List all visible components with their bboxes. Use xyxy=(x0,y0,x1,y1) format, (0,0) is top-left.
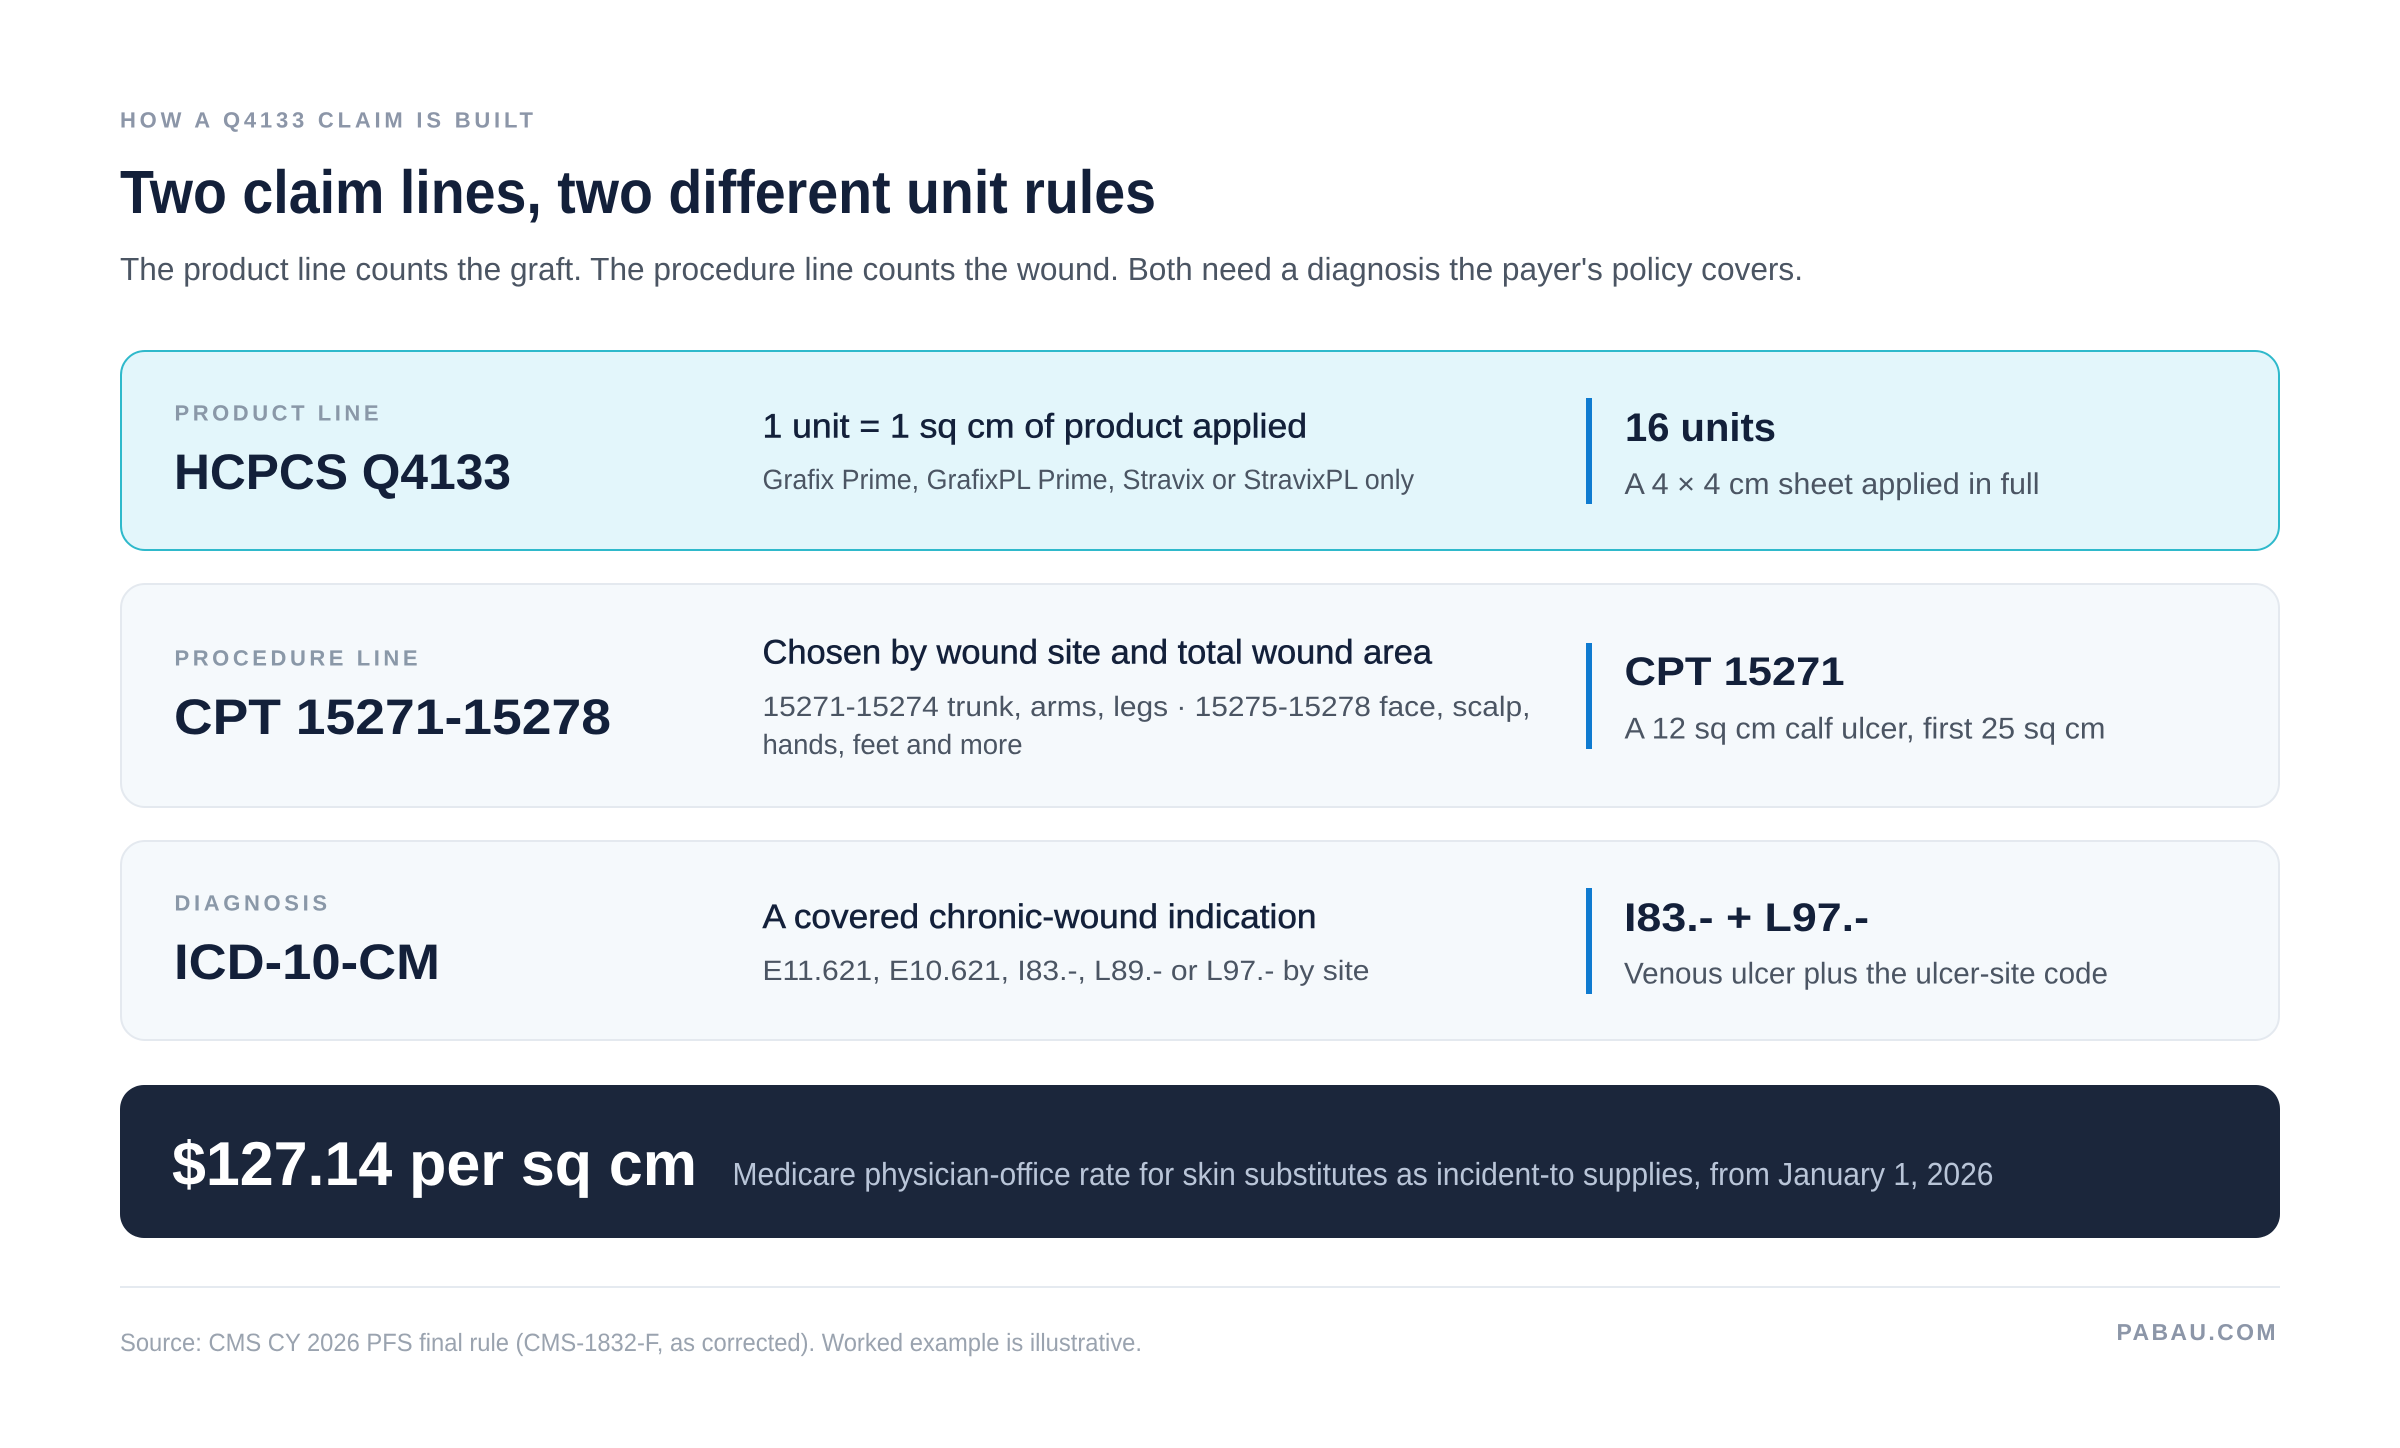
example value: CPT 15271 xyxy=(1624,650,1844,694)
label: product line: PRODUCT LINE xyxy=(174,400,378,426)
example value: 16 units xyxy=(1625,406,1776,450)
source note: Source: CMS CY 2026 PFS final rule (CMS-1832-F, as corrected). Worked example is illustrative. xyxy=(120,1329,1142,1357)
accent bar xyxy=(1586,398,1592,504)
example note: A 12 sq cm calf ulcer, first 25 sq cm xyxy=(1624,712,2106,746)
code: ICD-10-CM: ICD-10-CM xyxy=(174,934,440,990)
rule heading: A covered chronic-wound indication xyxy=(762,898,1316,936)
example note: A 4 × 4 cm sheet applied in full xyxy=(1624,468,2040,501)
panel: procedure line xyxy=(121,584,2279,807)
accent bar xyxy=(1586,643,1592,749)
panel: diagnosis xyxy=(121,841,2279,1040)
brand: PABAU.COM xyxy=(2116,1319,2276,1345)
example value: I83.- + L97.- xyxy=(1624,896,1869,940)
example note: Venous ulcer plus the ulcer-site code xyxy=(1624,958,2108,990)
code: HCPCS Q4133: HCPCS Q4133 xyxy=(174,444,511,500)
rate figure: $127.14 per sq cm xyxy=(172,1130,697,1199)
rule detail: E11.621, E10.621, I83.-, L89.- or L97.- by site xyxy=(762,955,1370,986)
accent bar xyxy=(1586,888,1592,994)
rule detail: Grafix Prime, GrafixPL Prime, Stravix or StravixPL only xyxy=(762,464,1414,495)
panel: product line xyxy=(121,351,2279,550)
rule heading: Chosen by wound site and total wound area xyxy=(762,634,1432,672)
rule detail: 15271-15274 trunk, arms, legs · 15275-15278 face, scalp, xyxy=(762,691,1530,722)
rule heading: 1 unit = 1 sq cm of product applied xyxy=(762,408,1307,446)
subtitle: The product line counts the graft. The procedure line counts the wound. Both need a diagnosis the payer's policy covers. xyxy=(120,251,1803,287)
rule detail: hands, feet and more xyxy=(762,729,1022,760)
label: diagnosis: DIAGNOSIS xyxy=(174,890,327,916)
eyebrow: HOW A Q4133 CLAIM IS BUILT xyxy=(120,108,534,132)
label: procedure line: PROCEDURE LINE xyxy=(174,646,418,670)
banner: Medicare rate xyxy=(120,1085,2280,1238)
rate description: Medicare physician-office rate for skin substitutes as incident-to supplies, from January 1, 2026 xyxy=(732,1156,1994,1192)
title: Two claim lines, two different unit rules xyxy=(120,158,1156,226)
rule detail xyxy=(762,691,1530,760)
code: CPT range: CPT 15271-15278 xyxy=(174,689,611,745)
